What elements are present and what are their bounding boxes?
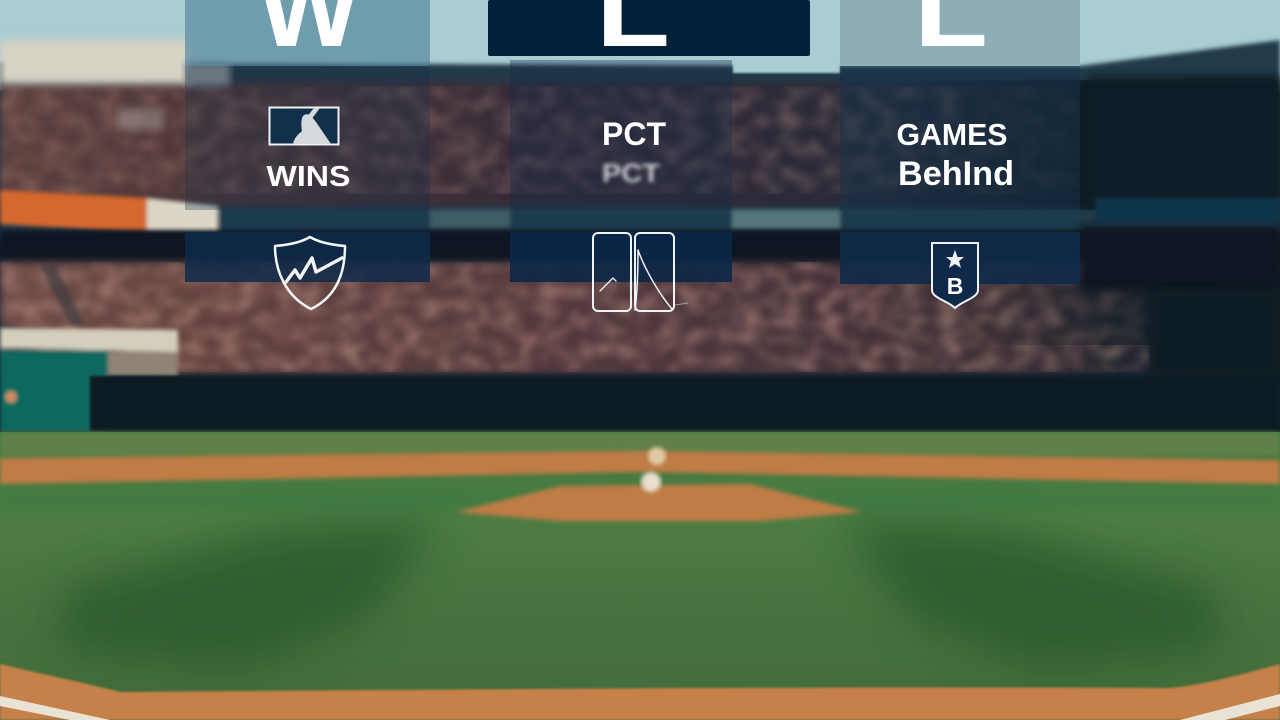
- foul lines: [0, 696, 110, 720]
- label: wins: WINS: [266, 161, 350, 193]
- pitcher's mound: [456, 484, 862, 521]
- panel: games behind column: [840, 0, 1080, 284]
- label: blurred sublabel: PCT: [602, 158, 660, 188]
- mow pattern: [60, 520, 440, 670]
- outfield wall: [90, 376, 1280, 432]
- lower grandstand crowd: [0, 226, 1280, 376]
- field: [0, 432, 1280, 720]
- bottom dirt: [0, 664, 1280, 720]
- panel: wins column: [185, 0, 430, 282]
- icon: shield with star and B: [932, 243, 978, 308]
- icon: shield with trend line: [275, 237, 345, 309]
- label: behind: BehInd: [898, 155, 1014, 193]
- sky: [0, 0, 1280, 90]
- label: games: GAMES: [896, 117, 1008, 152]
- label: pct: PCT: [602, 116, 666, 152]
- icon: split rectangle chart: [593, 233, 688, 311]
- upper grandstand: [0, 40, 1280, 240]
- panel: pct column: [488, 0, 810, 282]
- orange facade band: [0, 190, 1280, 234]
- infield dirt strip: [0, 451, 1280, 484]
- dark band under upper deck: [0, 230, 1280, 262]
- orange figure on wall: [4, 390, 18, 404]
- icon: shield with star and B: B: [947, 273, 963, 299]
- balls: [641, 472, 661, 492]
- left wall teal and white cap: [0, 328, 178, 432]
- icon: batter logo: [270, 108, 338, 144]
